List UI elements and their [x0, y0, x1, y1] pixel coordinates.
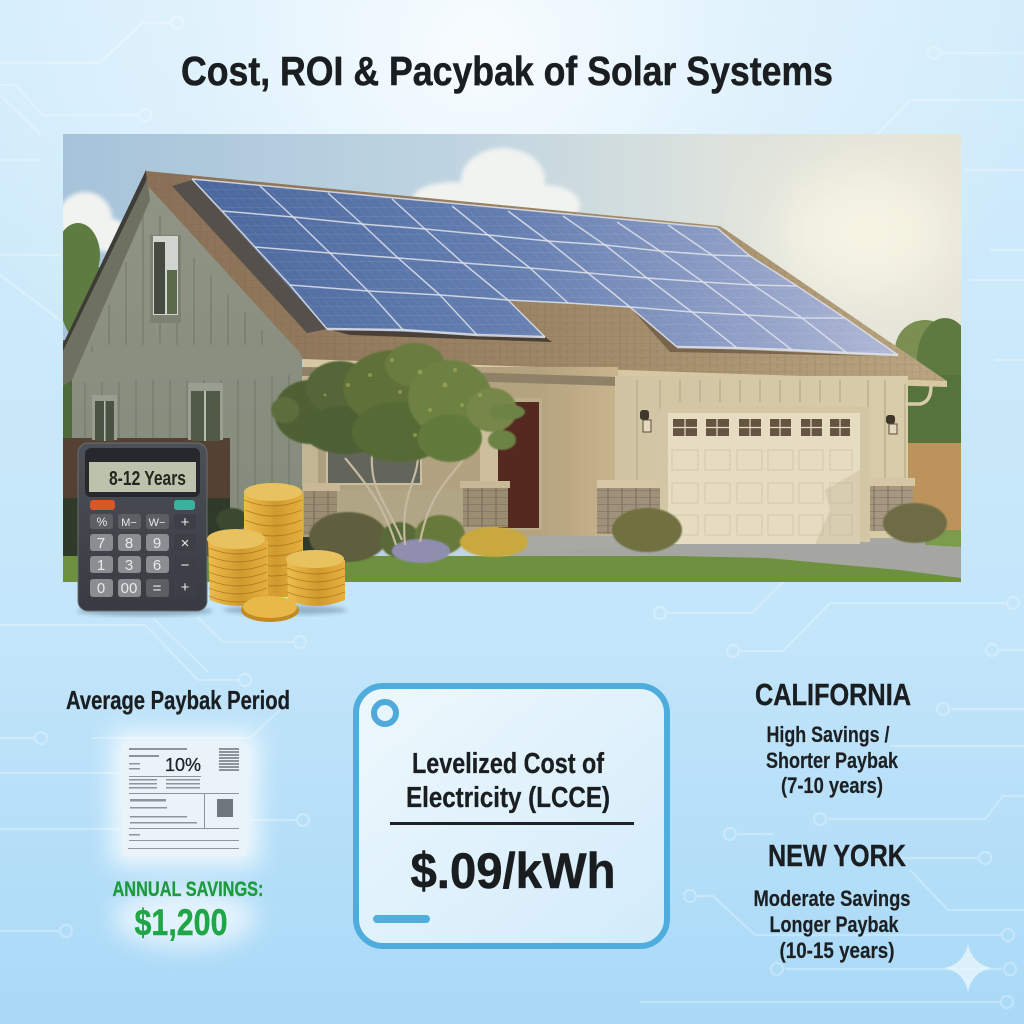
calculator keypad: 9: [153, 535, 161, 552]
walkway and driveway: [522, 536, 961, 578]
right coin stack: [286, 550, 345, 606]
sun glow: [775, 167, 955, 297]
card value: $.09/kWh: [410, 843, 616, 899]
calculator bezel: [85, 448, 200, 497]
calculator keypad: 00: [121, 580, 137, 597]
gable fascia: [63, 172, 150, 386]
wall trim band: [84, 382, 86, 383]
front window and door: [302, 376, 542, 532]
front coin: [241, 596, 299, 622]
calculator keypad: %: [97, 515, 108, 529]
lawn: [63, 530, 961, 582]
sky: [63, 134, 961, 582]
gable wall: [72, 183, 302, 530]
new york text: (10-15 years): [780, 938, 894, 963]
right column: states: [754, 677, 911, 963]
calculator indicator keys: [90, 500, 195, 510]
garage door: [660, 407, 870, 544]
calculator keypad: ×: [181, 535, 189, 552]
fence right: [908, 443, 961, 530]
ground under the house: [63, 495, 925, 557]
calculator display: [89, 462, 196, 492]
new york heading: NEW YORK: [768, 838, 906, 873]
calculator keypad: 8: [125, 535, 133, 552]
calculator keypad: 7: [97, 535, 105, 552]
calculator keypad: +: [181, 579, 190, 596]
lower windows: [92, 383, 223, 441]
calculator keypad: W−: [149, 517, 165, 529]
solar panels: [192, 179, 898, 355]
background trees: [56, 223, 973, 447]
card divider: [390, 822, 634, 825]
calculator keypad: 6: [153, 557, 161, 574]
left coin stack: [207, 529, 268, 606]
title: Cost, ROI & Pacybak of Solar Systems: [181, 48, 833, 94]
shadow below panels: [327, 329, 552, 342]
new york text: Moderate Savings: [754, 886, 910, 911]
california text: Shorter Paybak: [766, 748, 899, 773]
calculator shadow: [77, 606, 213, 616]
calculator keypad: =: [153, 580, 162, 597]
wall lamps: [640, 410, 897, 434]
front tree: [271, 343, 525, 545]
calculator body: [78, 443, 207, 611]
roof: [146, 171, 947, 381]
LCOE card: [356, 686, 667, 946]
upper window: [150, 235, 181, 323]
california text: High Savings /: [766, 722, 890, 747]
annual savings label: ANNUAL SAVINGS:: [112, 878, 264, 901]
document glow: [112, 732, 258, 866]
calculator display: 8-12 Years: [109, 468, 186, 490]
california heading: CALIFORNIA: [755, 677, 911, 712]
bill percent: 10%: [165, 755, 201, 775]
utility bill document: [122, 743, 247, 856]
card heading: Electricity (LCCE): [406, 782, 610, 814]
bill qr code: [217, 799, 233, 817]
clouds: [58, 148, 580, 252]
eave: [303, 359, 947, 387]
coin shadow: [223, 605, 347, 615]
heading: average payback period: Average Paybak Period: [66, 685, 290, 715]
gutter: [905, 386, 931, 404]
shrubs: [216, 503, 947, 563]
new york text: Longer Paybak: [770, 912, 899, 937]
left column: average payback: [66, 685, 290, 948]
savings glow: [113, 888, 257, 948]
calculator keypad: 1: [97, 557, 105, 574]
card accent pill: [373, 915, 430, 923]
shaded shingles: [172, 180, 327, 333]
calculator keypad: [90, 514, 196, 597]
porch wall: [302, 367, 618, 537]
calculator keypad: M−: [121, 517, 137, 529]
annual savings value: $1,200: [134, 902, 228, 943]
calculator keypad: −: [181, 557, 190, 574]
calculator: [77, 443, 213, 616]
card frame: [356, 686, 667, 946]
house photo: [56, 134, 973, 582]
sparkle star: [944, 944, 992, 992]
california text: (7-10 years): [781, 773, 883, 798]
bill barcode: [219, 749, 239, 770]
calculator keypad: 3: [125, 557, 133, 574]
calculator keypad: +: [181, 514, 190, 531]
fence left: [63, 438, 230, 498]
calculator keypad: 0: [97, 580, 105, 597]
center coin stack: [244, 483, 303, 597]
stone pillars: [303, 478, 915, 535]
card heading: Levelized Cost of: [412, 748, 604, 780]
garage wall: [615, 376, 908, 538]
gold coins: [207, 483, 347, 622]
card ring: [374, 702, 396, 724]
